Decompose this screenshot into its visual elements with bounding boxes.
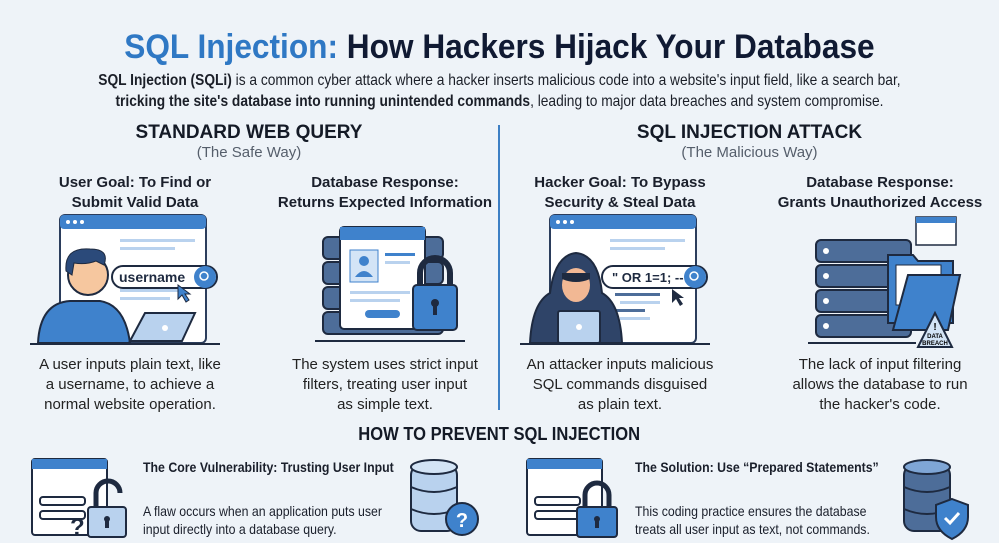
heading: prevention: HOW TO PREVENT SQL INJECTION: [359, 424, 640, 444]
panel: core vulnerability: input directly into a database query.: [143, 521, 337, 537]
goal 2: Returns Expected Information: [278, 194, 492, 211]
goal 2: Database Response:: [311, 174, 459, 191]
caption 2: [292, 356, 478, 413]
icon: data breach server: DATA: [927, 334, 944, 340]
icon: locked window: [526, 458, 618, 538]
goal 4: Grants Unauthorized Access: [778, 194, 982, 211]
heading right: SQL INJECTION ATTACK: [637, 122, 862, 143]
icon: hacker: [520, 214, 710, 345]
caption 3: An attacker inputs malicious: [527, 356, 713, 373]
heading left: STANDARD WEB QUERY: [136, 122, 362, 143]
icon: hacker: " OR 1=1; --: [612, 270, 684, 285]
caption 3: SQL commands disguised: [533, 376, 707, 393]
icon: data breach server: BREACH: [922, 341, 948, 347]
panel: standard web query: [30, 122, 492, 413]
caption 4: allows the database to run: [792, 376, 968, 393]
caption 4: The lack of input filtering: [799, 356, 961, 373]
icon: server with lock: [315, 226, 465, 342]
icon: user at laptop: username: [119, 269, 185, 285]
goal 3: [534, 174, 706, 211]
caption 2: The system uses strict input: [292, 356, 478, 373]
subheading left: (The Safe Way): [197, 144, 301, 161]
panel: core vulnerability: A flaw occurs when an application puts user: [143, 503, 382, 519]
icon: database question: [410, 459, 479, 536]
caption 4: [792, 356, 968, 413]
goal 4: Database Response:: [806, 174, 954, 191]
goal 1: User Goal: To Find or: [59, 174, 211, 191]
goal 1: Submit Valid Data: [72, 194, 198, 211]
icon: broken lock window: [31, 458, 127, 539]
icon: database question: ?: [456, 510, 468, 532]
panel: sql injection attack: [520, 122, 982, 413]
icon: data breach server: [808, 216, 962, 348]
text: solution: The Solution: Use “Prepared Statements”: [635, 459, 879, 475]
panel: solution: This coding practice ensures the database: [635, 503, 866, 519]
caption 3: [526, 356, 713, 413]
caption 2: filters, treating user input: [303, 376, 467, 393]
caption 3: as plain text.: [578, 396, 662, 413]
subheading right: (The Malicious Way): [681, 144, 818, 161]
goal 3: Hacker Goal: To Bypass: [534, 174, 706, 191]
goal 1: [59, 174, 211, 211]
intro text: [98, 72, 901, 110]
goal 4: [778, 174, 982, 211]
panel: core vulnerability: [31, 458, 479, 539]
caption 4: the hacker's code.: [819, 396, 941, 413]
divider: [498, 125, 500, 410]
caption 2: as simple text.: [337, 396, 433, 413]
caption 1: a username, to achieve a: [46, 376, 214, 393]
icon: user at laptop: [30, 214, 220, 345]
caption 1: [39, 356, 221, 413]
goal 2: [278, 174, 492, 211]
caption 1: A user inputs plain text, like: [39, 356, 221, 373]
text: core vulnerability: The Core Vulnerability: Trusting User Input: [143, 459, 394, 475]
panel: solution: [526, 458, 969, 540]
title: SQL Injection: How Hackers Hijack Your Database: [124, 28, 875, 66]
panel: solution: treats all user input as text, not commands.: [635, 521, 870, 537]
goal 3: Security & Steal Data: [545, 194, 695, 211]
icon: data breach server: !: [933, 322, 937, 333]
icon: database shield: [903, 459, 969, 540]
caption 1: normal website operation.: [44, 396, 216, 413]
intro text: SQL Injection (SQLi) is a common cyber attack where a hacker inserts malicious code into a website's input field, like a search bar,: [98, 72, 901, 89]
intro text: tricking the site's database into running unintended commands, leading to major data breaches and system compromise.: [116, 93, 883, 110]
